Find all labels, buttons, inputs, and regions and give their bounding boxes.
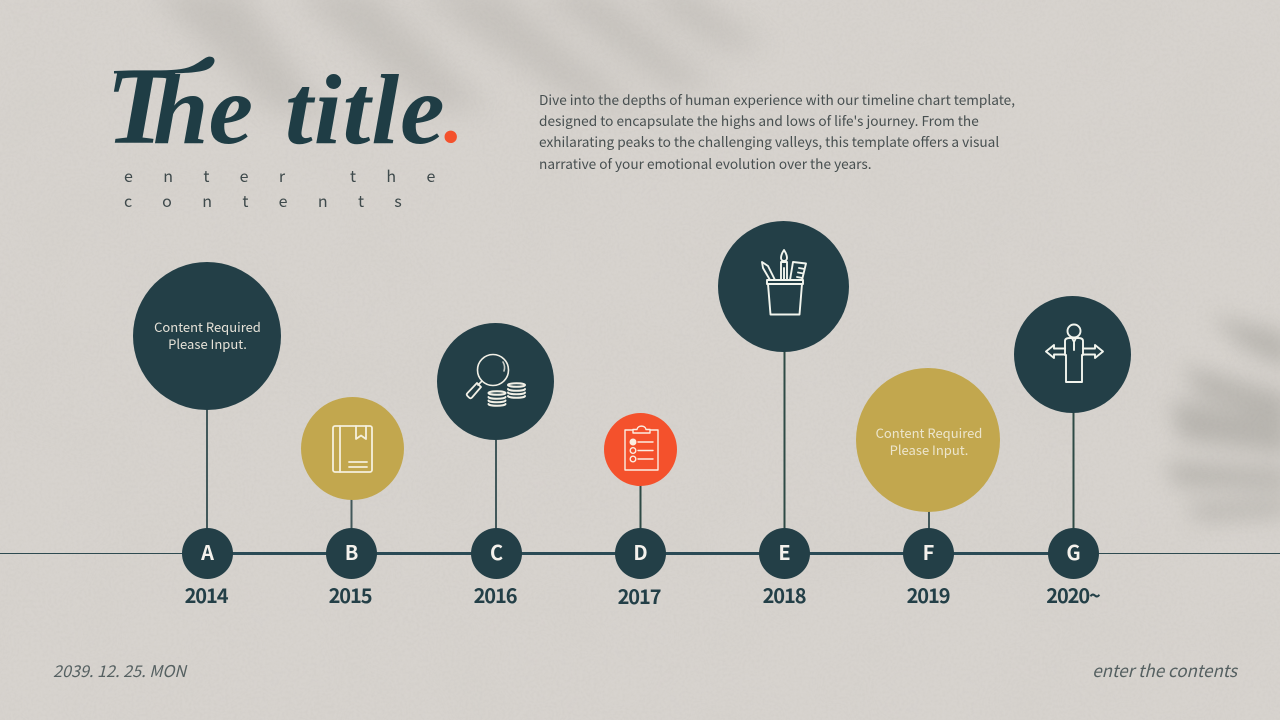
node F circle: F bbox=[923, 537, 934, 566]
bubble G: person with arrows icon bbox=[1014, 296, 1131, 413]
year 2019: 2019 bbox=[907, 580, 949, 609]
node C circle: C bbox=[490, 537, 503, 566]
node B circle bbox=[326, 528, 377, 579]
bubble A caption bbox=[154, 317, 261, 353]
node D circle: D bbox=[633, 537, 648, 566]
node D with year bbox=[615, 528, 666, 610]
year 2015: 2015 bbox=[329, 580, 371, 609]
node A with year bbox=[182, 528, 233, 609]
footer date: 2039. 12. 25. MON bbox=[53, 658, 186, 682]
node C with year bbox=[471, 528, 522, 609]
node F circle bbox=[903, 528, 954, 579]
bubble A caption: Please Input. bbox=[168, 334, 247, 353]
bubble E: pen cup icon bbox=[718, 221, 849, 352]
description text bbox=[539, 89, 1015, 173]
bubble D: clipboard icon bbox=[604, 413, 677, 486]
description text: Dive into the depths of human experience with our timeline chart template, bbox=[539, 89, 1015, 109]
node G circle bbox=[1048, 528, 1099, 579]
icon: magnifier and coins bbox=[466, 354, 526, 407]
description text: narrative of your emotional evolution over the years. bbox=[539, 153, 872, 173]
bubble C: magnifier and coins icon bbox=[437, 323, 554, 440]
subtitle bbox=[124, 163, 466, 212]
bubble B: book icon bbox=[301, 397, 404, 500]
node A circle bbox=[182, 528, 233, 579]
year 2018: 2018 bbox=[763, 580, 805, 609]
title: T bbox=[106, 48, 176, 167]
footer note: enter the contents bbox=[1092, 657, 1237, 682]
bubble F caption: Please Input. bbox=[890, 440, 968, 459]
description text: designed to encapsulate the highs and lows of life's journey. From the bbox=[539, 110, 979, 130]
bubble F caption bbox=[876, 423, 982, 459]
icon: person at a crossroads bbox=[1045, 324, 1104, 383]
node E with year bbox=[759, 528, 810, 609]
subtitle: contents bbox=[124, 188, 432, 212]
node G circle: G bbox=[1066, 537, 1081, 566]
bubble F: text bbox=[856, 368, 1000, 512]
title bbox=[106, 48, 463, 167]
title: . bbox=[444, 75, 463, 159]
node E circle: E bbox=[778, 537, 791, 566]
subtitle: enter bbox=[124, 163, 316, 187]
node F with year bbox=[903, 528, 954, 609]
bubble A: text bbox=[133, 262, 281, 410]
bubble A caption: Content Required bbox=[154, 317, 261, 336]
title: he bbox=[153, 54, 253, 165]
year 2016: 2016 bbox=[474, 580, 516, 609]
node C circle bbox=[471, 528, 522, 579]
bubble F caption: Content Required bbox=[876, 423, 982, 442]
description text: exhilarating peaks to the challenging valleys, this template offers a visual bbox=[539, 131, 999, 151]
icon: clipboard checklist bbox=[624, 425, 659, 471]
year 2017: 2017 bbox=[618, 581, 660, 610]
node G with year bbox=[1046, 528, 1100, 609]
node E circle bbox=[759, 528, 810, 579]
year 2020 onward: 2020~ bbox=[1046, 580, 1100, 609]
year 2014: 2014 bbox=[185, 580, 227, 609]
title: title bbox=[285, 54, 446, 165]
node B circle: B bbox=[345, 537, 358, 566]
icon: pencil cup bbox=[761, 249, 807, 316]
subtitle: the bbox=[350, 163, 466, 187]
node B with year bbox=[326, 528, 377, 609]
icon: book bbox=[332, 425, 373, 473]
node D circle bbox=[615, 528, 666, 579]
node A circle: A bbox=[201, 537, 214, 566]
